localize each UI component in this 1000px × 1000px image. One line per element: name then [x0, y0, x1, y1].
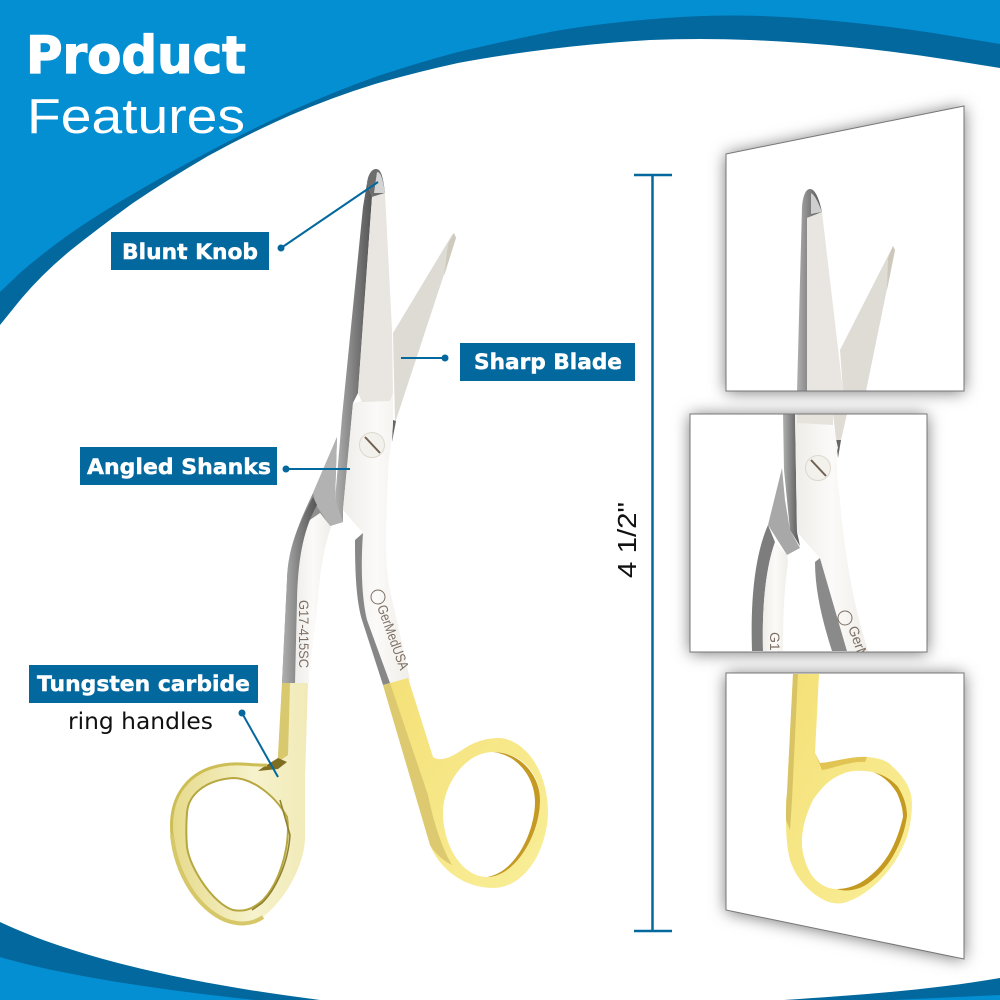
callout: Sharp Blade: Sharp Blade [474, 350, 622, 374]
engraved brand logo [371, 590, 413, 672]
panel: blade tip close-up [726, 106, 964, 391]
panel: pivot and shanks close-up: G17 [767, 632, 783, 659]
right ring handle [383, 678, 548, 888]
main scissors image [172, 169, 548, 923]
title: Product [26, 26, 246, 86]
panel: pivot and shanks close-up [690, 414, 927, 662]
callout: Angled Shanks [80, 447, 350, 485]
callout: Blunt Knob: Blunt Knob [122, 240, 258, 264]
title [26, 26, 246, 144]
bottom banner: light blue swoosh [0, 957, 1000, 1000]
callout: Tungsten carbide ring handles: Tungsten carbide [37, 672, 250, 696]
panel: ring handle close-up [726, 673, 964, 959]
callout: Sharp Blade [401, 343, 635, 381]
engraved model number: G17-415SC [296, 600, 312, 668]
left ring handle [172, 683, 308, 923]
callout: Tungsten carbide ring handles: ring handles [68, 709, 213, 735]
panel: pivot and shanks close-up: GerM [845, 624, 872, 662]
top banner: dark blue swoosh [0, 0, 1000, 325]
callout: Blunt Knob [111, 182, 378, 270]
dimension label: 4 1/2" [612, 502, 642, 578]
callout: Tungsten carbide ring handles [29, 665, 278, 777]
top banner: light blue swoosh [0, 0, 1000, 292]
engraved brand logo: GerMedUSA [374, 603, 413, 672]
dimension line [634, 175, 672, 932]
title: Features [27, 90, 245, 144]
callout: Angled Shanks: Angled Shanks [87, 455, 271, 479]
screw [360, 432, 384, 458]
bottom banner: dark blue swoosh [0, 922, 1000, 1000]
